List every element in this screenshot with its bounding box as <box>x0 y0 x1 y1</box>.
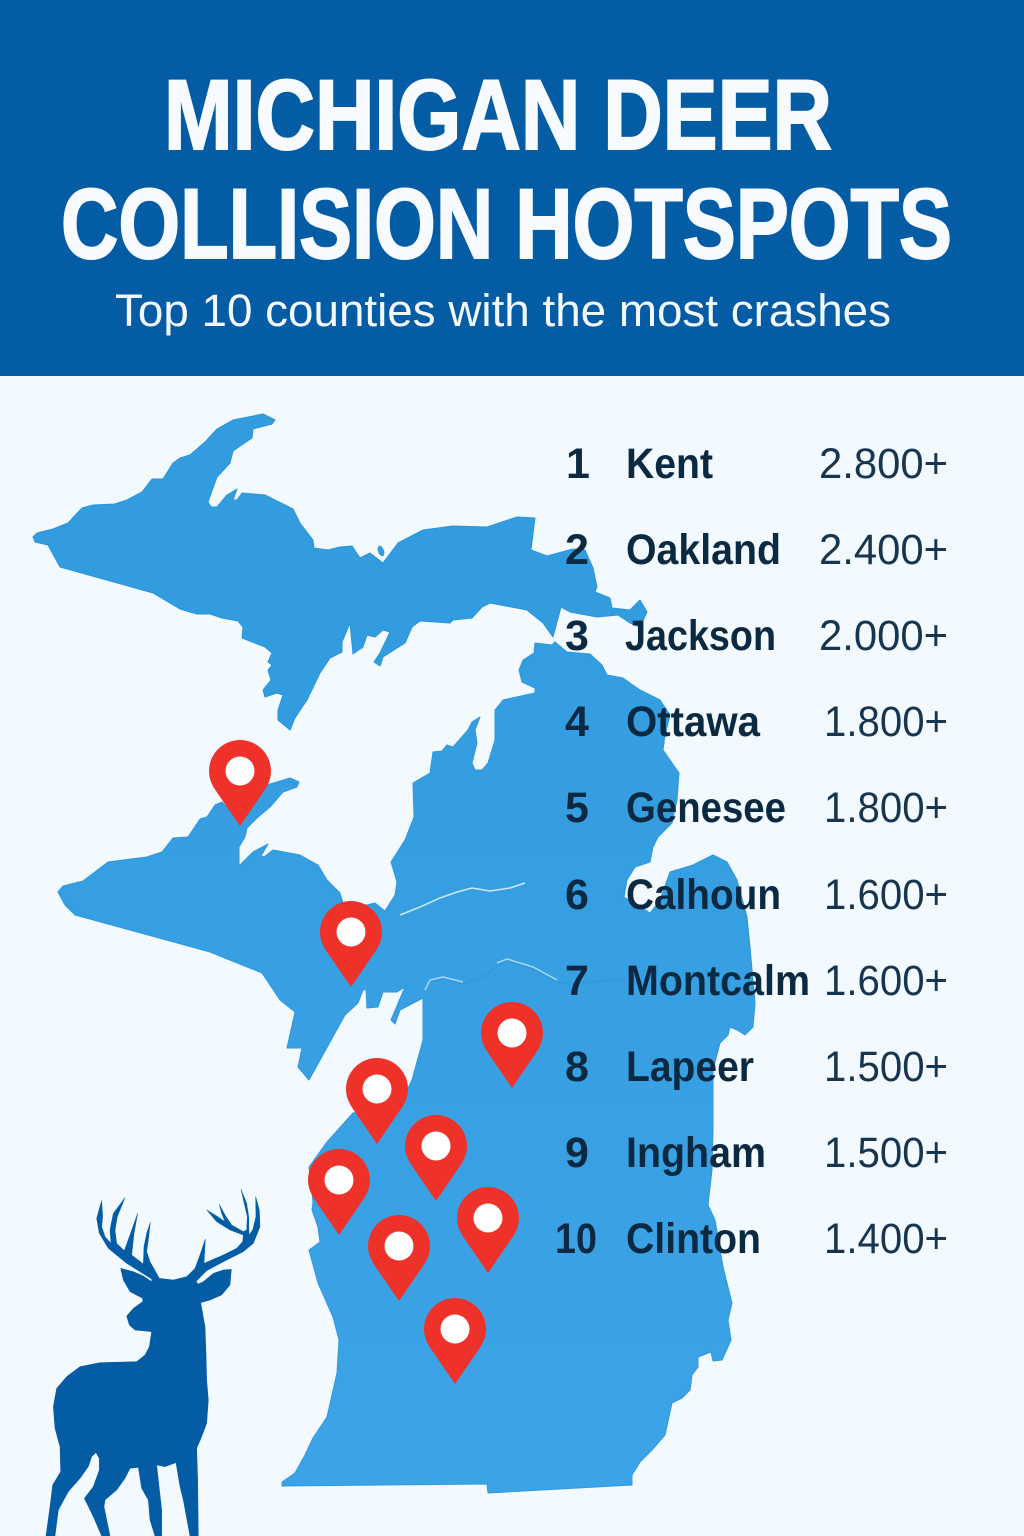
upper map shape <box>33 414 647 730</box>
row 4: Ottawa: Ottawa <box>626 698 761 746</box>
row 7: Montcalm: 7 <box>565 957 589 1005</box>
lower map shape <box>58 642 755 1493</box>
row 7: Montcalm: Montcalm <box>626 957 810 1005</box>
row 10: Clinton: 10 <box>555 1215 597 1263</box>
row 9: Ingham: 1.500+ <box>824 1129 948 1177</box>
row 8: Lapeer: 8 <box>565 1043 589 1091</box>
icon: deer silhouette <box>46 1189 260 1536</box>
row 2: Oakland: 2.400+ <box>819 526 948 574</box>
pin 6 <box>308 1149 370 1235</box>
row 3: Jackson: 2.000+ <box>819 612 948 660</box>
row 10: Clinton: 1.400+ <box>824 1215 948 1263</box>
pin 1 <box>209 740 271 826</box>
row 2: Oakland <box>565 526 948 574</box>
row 6: Calhoun: Calhoun <box>626 871 781 919</box>
subtitle: Top 10 counties with the most crashes <box>115 285 891 336</box>
row 6: Calhoun <box>565 871 948 919</box>
row 10: Clinton: Clinton <box>626 1215 761 1263</box>
row 5: Genesee: 1.800+ <box>824 784 948 832</box>
row 1: Kent <box>566 440 948 488</box>
row 4: Ottawa: 4 <box>565 698 589 746</box>
row 3: Jackson: Jackson <box>625 612 776 660</box>
row 5: Genesee: 5 <box>565 784 589 832</box>
row 2: Oakland: 2 <box>565 526 589 574</box>
pin 5 <box>405 1115 467 1201</box>
row 8: Lapeer <box>565 1043 948 1091</box>
row 1: Kent: Kent <box>626 440 713 488</box>
pin 7 <box>457 1187 519 1273</box>
row 10: Clinton <box>555 1215 948 1263</box>
header banner <box>0 0 1024 376</box>
row 3: Jackson: 3 <box>565 612 589 660</box>
pin 4 <box>346 1058 408 1144</box>
row 5: Genesee: Genesee <box>626 784 786 832</box>
row 3: Jackson <box>565 612 948 660</box>
pin 9 <box>424 1298 486 1384</box>
row 8: Lapeer: 1.500+ <box>824 1043 948 1091</box>
row 9: Ingham: Ingham <box>626 1129 766 1177</box>
row 1: Kent: 1 <box>566 440 590 488</box>
title <box>61 59 952 279</box>
pin 3 <box>481 1002 543 1088</box>
map of Michigan <box>33 414 755 1493</box>
pin 2 <box>320 901 382 987</box>
row 7: Montcalm: 1.600+ <box>824 957 948 1005</box>
row 4: Ottawa <box>565 698 948 746</box>
row 6: Calhoun: 6 <box>565 871 589 919</box>
ranked county list <box>555 440 948 1263</box>
row 9: Ingham <box>565 1129 948 1177</box>
map pins <box>209 740 543 1384</box>
pin 8 <box>368 1215 430 1301</box>
row 8: Lapeer: Lapeer <box>626 1043 754 1091</box>
row 6: Calhoun: 1.600+ <box>824 871 948 919</box>
row 7: Montcalm <box>565 957 948 1005</box>
title: MICHIGAN DEER <box>164 59 832 170</box>
row 2: Oakland: Oakland <box>626 526 781 574</box>
row 5: Genesee <box>565 784 948 832</box>
row 9: Ingham: 9 <box>565 1129 589 1177</box>
row 4: Ottawa: 1.800+ <box>824 698 948 746</box>
row 1: Kent: 2.800+ <box>819 440 948 488</box>
strait lines <box>400 883 627 990</box>
